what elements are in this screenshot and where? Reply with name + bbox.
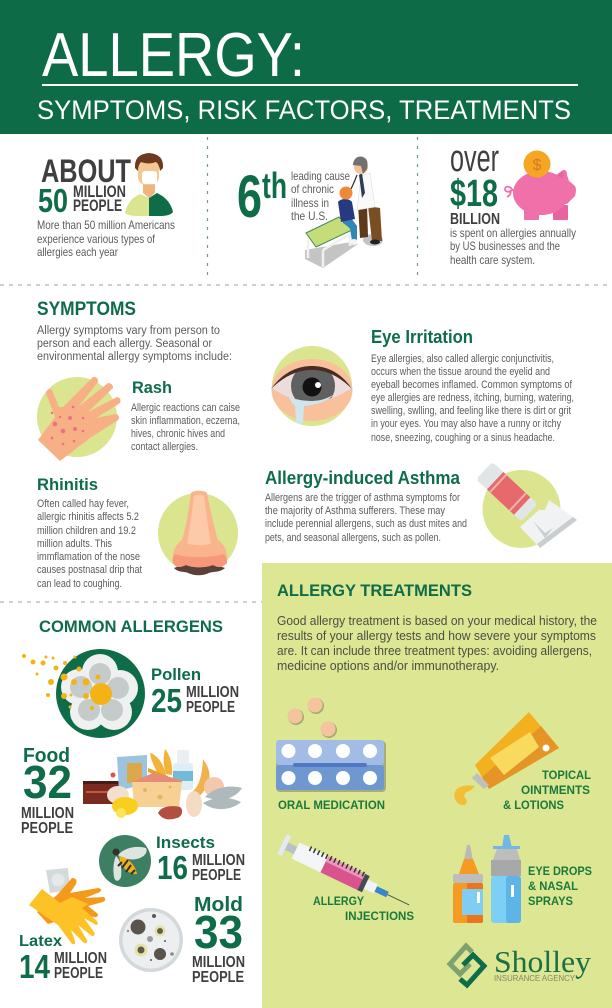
allergen: mold [119, 894, 245, 986]
panel: allergy treatments [262, 563, 612, 1008]
symptom: eye irritation: Eye Irritation [371, 327, 473, 347]
symptom: eye irritation: Eye allergies, also called allergic conjunctivitis, [371, 353, 554, 365]
allergen: pollen: 25 [151, 682, 182, 719]
treatment: allergy injections: INJECTIONS [345, 909, 414, 923]
allergen: latex [19, 868, 107, 985]
symptom: allergy-induced asthma: Allergy-induced Asthma [265, 468, 461, 488]
treatments intro text: results of your allergy tests and how severe your symptoms [277, 628, 596, 643]
stat: about 50 million people: 50 [38, 182, 68, 219]
icon: petri dish [119, 908, 183, 972]
allergen: insects: Insects [156, 834, 215, 852]
stat: over $18 billion: over [450, 138, 499, 180]
icon: bee [99, 835, 151, 887]
icon: flower with pollen [22, 649, 145, 738]
symptom: eye irritation: eyeball becomes inflamed. Common symptoms of [371, 379, 573, 391]
stat: 6th leading cause: 6 [237, 163, 262, 230]
treatment: topical ointments and lotions: TOPICAL [542, 768, 591, 782]
stat: 6th leading cause [237, 156, 383, 268]
symptom: rhinitis: allergic rhinitis affects 5.2 [37, 511, 139, 523]
symptom: rash: Rash [132, 378, 172, 397]
stat: 6th leading cause: illness in [291, 196, 329, 210]
stat: about 50 million people [37, 153, 175, 259]
icon: watering eye [271, 346, 352, 426]
symptom: rhinitis: can lead to coughing. [37, 578, 122, 590]
allergen: insects: PEOPLE [192, 867, 241, 884]
allergen: pollen [22, 649, 239, 738]
allergen: latex: 14 [19, 948, 51, 985]
treatment: oral medication [276, 698, 386, 812]
symptom: rash: hives, chronic hives and [131, 428, 225, 440]
stat: over $18 billion: BILLION [450, 211, 500, 228]
treatments intro text: are. It can include three treatment types: avoiding allergens, [277, 643, 592, 658]
allergen: pollen: Pollen [151, 665, 201, 684]
stat: over $18 billion: is spent on allergies annually [450, 226, 576, 240]
allergen: pollen: PEOPLE [186, 699, 235, 716]
allergen: insects [99, 834, 245, 887]
icon: hand with rash [37, 377, 121, 461]
allergen: food: MILLION [21, 805, 74, 822]
treatment: topical ointments and lotions: OINTMENTS [521, 783, 590, 797]
icon: inhaler [476, 462, 577, 548]
stat: 6th leading cause: leading cause [291, 169, 350, 183]
icon: person wearing mask [125, 153, 173, 216]
symptom: allergy-induced asthma: include perennial allergens, such as dust mites and [265, 518, 467, 530]
stat: about 50 million people: ABOUT [41, 153, 131, 189]
symptom: rhinitis [37, 475, 238, 590]
symptom: rhinitis: Rhinitis [37, 475, 98, 494]
allergen: food: PEOPLE [21, 820, 73, 837]
symptom: eye irritation: in your eyes. You may also have a runny or itchy [371, 418, 561, 430]
symptom: rhinitis: Often called hay fever, [37, 498, 129, 510]
allergen: mold: 33 [194, 906, 243, 958]
treatment: allergy injections: ALLERGY [313, 894, 364, 908]
symptom: rash [37, 377, 240, 461]
stat: over $18 billion: $18 [450, 173, 498, 215]
stat: about 50 million people: experience various types of [37, 232, 156, 246]
stat: over $18 billion: health care system. [450, 253, 535, 267]
symptom: rash: Allergic reactions can caise [131, 402, 240, 414]
stat: about 50 million people: PEOPLE [73, 197, 122, 215]
treatment: oral medication: ORAL MEDICATION [278, 798, 385, 812]
treatment: topical ointments and lotions: & LOTIONS [503, 798, 564, 812]
allergen: mold: PEOPLE [192, 969, 244, 986]
symptoms intro text: person and each allergy. Seasonal or [37, 338, 212, 350]
icon: nose [158, 491, 238, 575]
allergen: insects: 16 [157, 849, 188, 886]
symptom: allergy-induced asthma: Allergens are the trigger of asthma symptoms for [265, 492, 460, 504]
treatment: eye drops and nasal sprays [453, 835, 592, 923]
logo: Sholley Insurance Agency: INSURANCE AGENCY [494, 973, 575, 983]
treatments intro text: medicine options and/or immunotherapy. [277, 658, 499, 673]
header banner [0, 0, 612, 134]
symptom: rhinitis: causes postnasal drip that [37, 564, 142, 576]
treatment: topical ointments and lotions [454, 712, 591, 812]
icon: latex gloves [29, 868, 105, 944]
stat: 6th leading cause: th [262, 165, 287, 206]
symptom: allergy-induced asthma [265, 462, 577, 548]
stat: over $18 billion: by US businesses and the [450, 239, 560, 253]
allergen: latex: PEOPLE [54, 965, 103, 982]
treatment: eye drops and nasal sprays: & NASAL [528, 879, 578, 893]
title: ALLERGY: [42, 21, 305, 90]
symptom: eye irritation: nose, sneezing, coughing or a sinus headache. [371, 432, 555, 444]
symptom: rhinitis: million children and 19.2 [37, 525, 136, 537]
symptoms intro text [37, 325, 232, 363]
icon: piggy bank with coin: $ [533, 157, 542, 174]
allergen: mold: Mold [194, 894, 243, 916]
stat: about 50 million people: More than 50 million Americans [37, 218, 175, 232]
treatment: allergy injections [277, 834, 414, 923]
allergen: food [21, 745, 242, 837]
symptom: rhinitis: million adults. This [37, 538, 112, 550]
symptom: rash: skin inflammation, eczema, [131, 415, 240, 427]
allergen: insects: MILLION [192, 852, 245, 869]
stat: 6th leading cause: the U.S. [291, 209, 328, 223]
icon: assorted foods [83, 749, 242, 819]
stat: over $18 billion [450, 138, 576, 267]
treatment: eye drops and nasal sprays: SPRAYS [528, 894, 573, 908]
allergen: latex: Latex [19, 933, 62, 950]
icon: doctor examining child [305, 156, 383, 268]
symptom: eye irritation: occurs when the tissue around the eyelid and [371, 366, 550, 378]
heading: symptoms: SYMPTOMS [37, 299, 136, 320]
symptom: eye irritation [271, 327, 574, 444]
symptoms intro text: environmental allergy symptoms include: [37, 351, 232, 363]
heading: common allergens: COMMON ALLERGENS [39, 617, 223, 636]
subtitle: SYMPTOMS, RISK FACTORS, TREATMENTS [37, 95, 571, 125]
allergen: food: Food [23, 745, 70, 767]
logo: Sholley Insurance Agency [450, 944, 592, 985]
symptoms intro text: Allergy symptoms vary from person to [37, 325, 220, 337]
symptom: allergy-induced asthma: the majority of Asthma sufferers. These may [265, 505, 445, 517]
treatment: eye drops and nasal sprays: EYE DROPS [528, 864, 592, 878]
allergen: latex: MILLION [54, 950, 107, 967]
treatments intro text [277, 613, 597, 673]
symptom: allergy-induced asthma: pets, and seasonal allergens, such as pollen. [265, 532, 441, 544]
logo: Sholley Insurance Agency: Sholley [494, 944, 592, 979]
allergen: food: 32 [23, 756, 72, 808]
stat: 6th leading cause: of chronic [291, 182, 334, 196]
allergen: mold: MILLION [192, 954, 245, 971]
symptom: rhinitis: immflamation of the nose [37, 551, 140, 563]
heading: allergy treatments: ALLERGY TREATMENTS [277, 581, 472, 600]
symptom: eye irritation: swelling, swlling, and feeling like there is dirt or grit [371, 405, 571, 417]
symptom: rash: contact allergies. [131, 441, 198, 453]
allergen: pollen: MILLION [186, 684, 239, 701]
stat: about 50 million people: allergies each year [37, 245, 118, 259]
stat: about 50 million people: MILLION [73, 183, 126, 201]
